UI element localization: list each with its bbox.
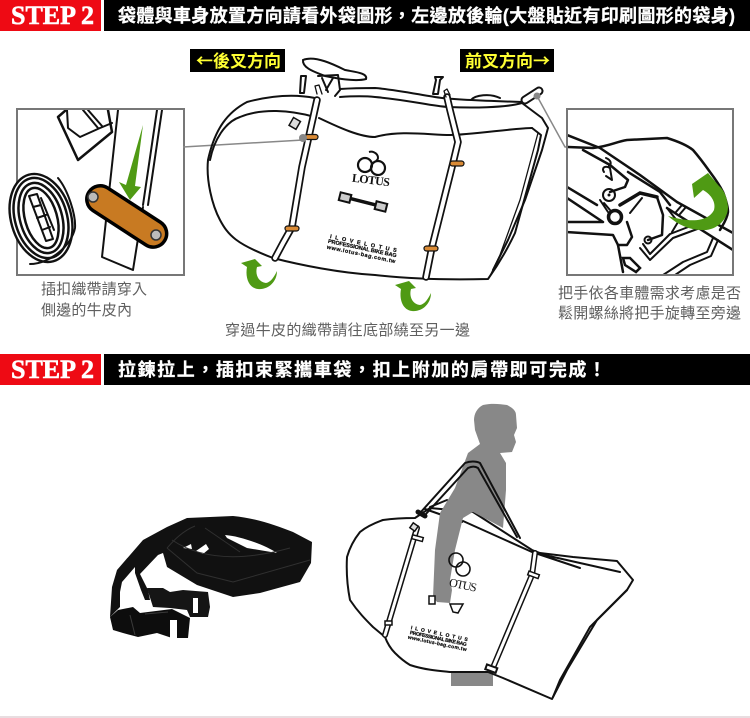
icon: green curved arrow	[668, 173, 728, 230]
text: bag print	[325, 234, 399, 265]
icon: leather patch	[82, 181, 172, 252]
icon: upper buckle	[58, 110, 112, 160]
icon: green down arrow	[119, 125, 143, 200]
logo: LOTUS	[351, 152, 391, 189]
text: bag print: I L O V E L O T U S	[410, 625, 469, 643]
text: handle caption: 把手依各車體需求考慮是否	[558, 285, 741, 302]
icon: carry tag on bag	[429, 596, 463, 613]
label: rear fork direction: ←後叉方向	[196, 47, 281, 72]
text: bag print: www.lotus-bag.com.tw	[325, 244, 397, 265]
text: handle caption: 鬆開螺絲將把手旋轉至旁邊	[558, 305, 741, 322]
text: bag print: PROFESSIONAL BIKE BAG	[327, 239, 397, 259]
photo: black straps with buckles	[110, 516, 312, 638]
label: front fork direction: 前叉方向→	[465, 47, 550, 72]
panel: handle rotate detail	[567, 109, 733, 275]
text: insert strap caption: 側邊的牛皮內	[41, 302, 132, 319]
bottom border	[0, 716, 750, 718]
illustration: bag on bike top view	[208, 59, 548, 279]
handle	[525, 91, 539, 100]
bag outline	[347, 500, 633, 699]
text: bag print	[406, 625, 469, 653]
text: insert strap caption	[41, 281, 147, 319]
person legs	[451, 673, 493, 686]
person silhouette	[433, 404, 517, 603]
straps on bag	[385, 523, 539, 673]
panel: strap through leather detail	[0, 109, 184, 275]
pointer line right	[537, 96, 567, 147]
icon: saddle	[300, 59, 443, 96]
icon: coiled strap	[0, 166, 82, 270]
header bar: step 2 bottom: 拉鍊拉上，插扣束緊攜車袋，扣上附加的肩帶即可完成！	[118, 359, 606, 380]
header bar: step 2 bottom: STEP 2	[11, 355, 94, 384]
text: bag print: PROFESSIONAL BIKE BAG	[409, 630, 467, 648]
header bar: step 2 top	[0, 0, 750, 31]
header bar: step 2 top: STEP 2	[11, 1, 94, 30]
straps	[275, 85, 464, 277]
icon: small lock tag	[289, 118, 300, 129]
text: bag print: www.lotus-bag.com.tw	[406, 635, 467, 653]
header bar: step 2 top: 袋體與車身放置方向請看外袋圖形，左邊放後輪(大盤貼近有印刷圖形的袋身)	[118, 5, 735, 26]
bag outline	[208, 88, 548, 279]
icon: green return arrow 2	[395, 281, 431, 311]
illustration: person carrying bag	[347, 404, 633, 699]
text: wrap under bag caption: 穿過牛皮的織帶請往底部繞至另一邊	[225, 322, 470, 339]
gray dots	[299, 92, 540, 142]
text: bag print: I L O V E L O T U S	[329, 234, 397, 254]
icon: carry tag	[339, 192, 387, 212]
pointer line left	[183, 140, 303, 147]
icon: green return arrow 1	[241, 259, 277, 289]
text: handle caption	[558, 285, 741, 322]
icon: strap band	[102, 110, 162, 270]
text: insert strap caption: 插扣織帶請穿入	[41, 281, 147, 298]
shoulder strap	[418, 462, 520, 538]
logo: LOTUS on bag	[448, 553, 478, 595]
header bar: step 2 bottom	[0, 354, 750, 385]
logo: LOTUS: LOTUS	[351, 171, 391, 189]
logo: LOTUS on bag: OTUS	[448, 575, 478, 595]
frame line art	[567, 135, 733, 275]
